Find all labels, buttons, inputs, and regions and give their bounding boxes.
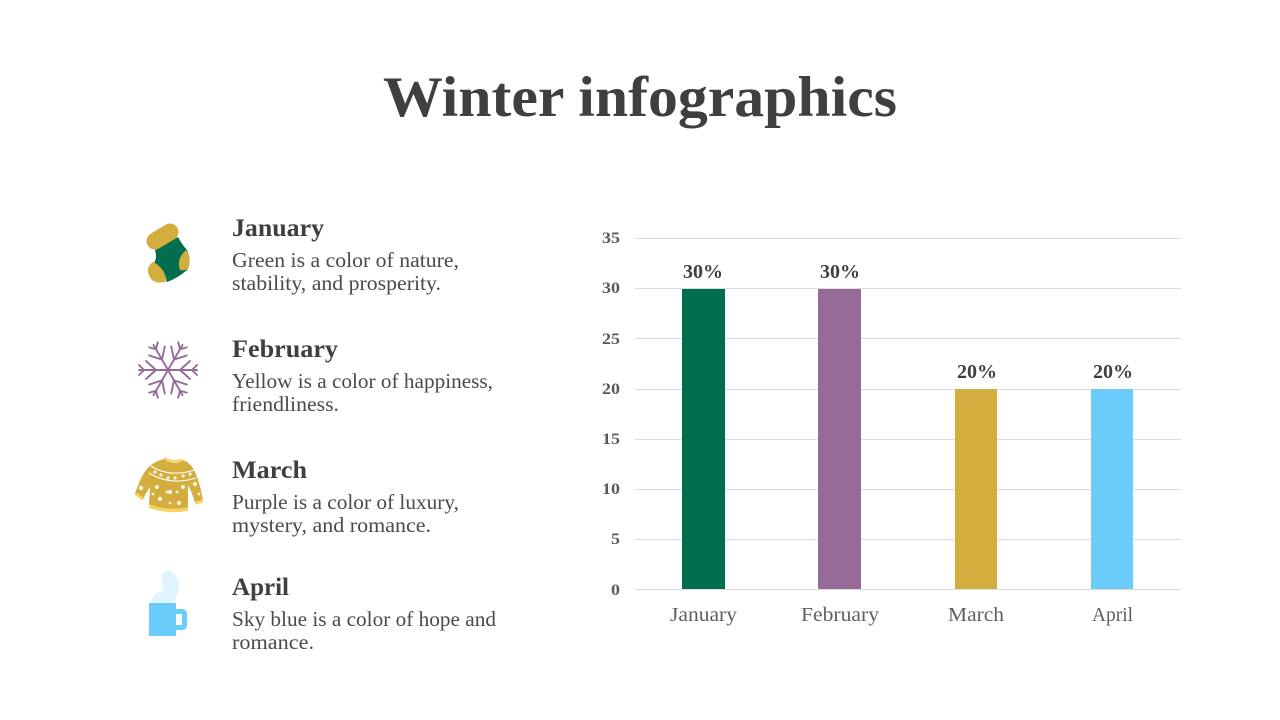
description: January: stability, and prosperity. <box>232 271 441 295</box>
value labels: 30% <box>820 261 860 283</box>
heading: April: April <box>232 574 289 601</box>
category labels: April <box>1092 604 1133 626</box>
category labels: January <box>670 604 737 626</box>
description: April: romance. <box>232 630 314 654</box>
value labels: 20% <box>957 361 997 383</box>
value labels: 20% <box>1093 361 1133 383</box>
icon: mug <box>149 571 184 636</box>
y axis labels: 25 <box>602 331 620 348</box>
category labels: March <box>948 604 1004 626</box>
y axis labels: 10 <box>602 481 620 498</box>
heading: February: February <box>232 336 339 363</box>
y axis labels: 0 <box>611 582 620 599</box>
category labels <box>670 604 1133 626</box>
bar: January <box>682 289 725 589</box>
category labels: February <box>801 604 879 626</box>
description: March: mystery, and romance. <box>232 513 431 537</box>
item: January <box>148 215 459 295</box>
y axis labels: 15 <box>602 431 620 448</box>
y axis labels: 35 <box>602 230 620 247</box>
y axis labels: 20 <box>602 381 620 398</box>
value labels: 30% <box>683 261 723 283</box>
heading: January: January <box>232 215 325 242</box>
icon: stocking <box>148 232 190 283</box>
y axis labels: 5 <box>611 531 620 548</box>
description: April: Sky blue is a color of hope and <box>232 607 496 631</box>
icon: snowflake <box>139 340 197 400</box>
title: Winter infographics <box>383 66 897 129</box>
description: February: Yellow is a color of happiness, <box>232 369 493 393</box>
icon: sweater <box>135 458 203 510</box>
y axis labels <box>602 230 620 599</box>
y axis labels: 30 <box>602 280 620 297</box>
bar: February <box>818 289 861 589</box>
heading: March: March <box>232 457 307 484</box>
panel: months list <box>135 215 496 654</box>
bar chart <box>602 230 1181 626</box>
bar: March <box>955 389 997 589</box>
item: February <box>139 336 493 416</box>
description: January: Green is a color of nature, <box>232 248 459 272</box>
description: February: friendliness. <box>232 392 339 416</box>
bar: April <box>1091 389 1133 589</box>
item: March <box>135 457 459 537</box>
value labels <box>683 261 1133 383</box>
description: March: Purple is a color of luxury, <box>232 490 459 514</box>
item: April <box>149 571 496 654</box>
